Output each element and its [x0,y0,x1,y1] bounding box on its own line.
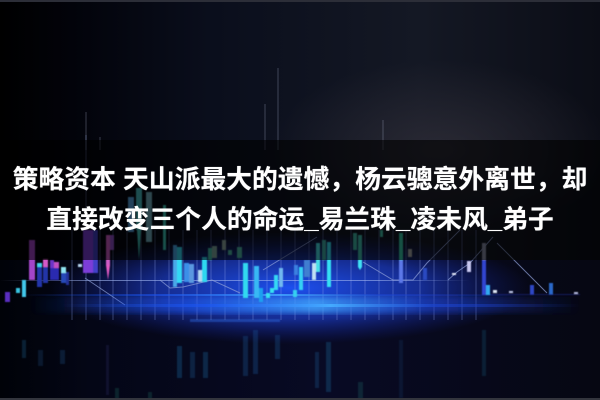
trend line [85,230,547,305]
text: 策略资本 天山派最大的遗憾，杨云骢意外离世，却 [13,166,587,194]
title [13,165,587,234]
grid lines [72,135,476,320]
text: 直接改变三个人的命运_易兰珠_凌未风_弟子 [46,206,554,234]
dark title band [0,140,600,260]
reflected candlesticks [22,330,486,400]
glow stripes [30,297,580,322]
horizontal chart lines [0,280,520,296]
candlesticks [5,188,580,302]
